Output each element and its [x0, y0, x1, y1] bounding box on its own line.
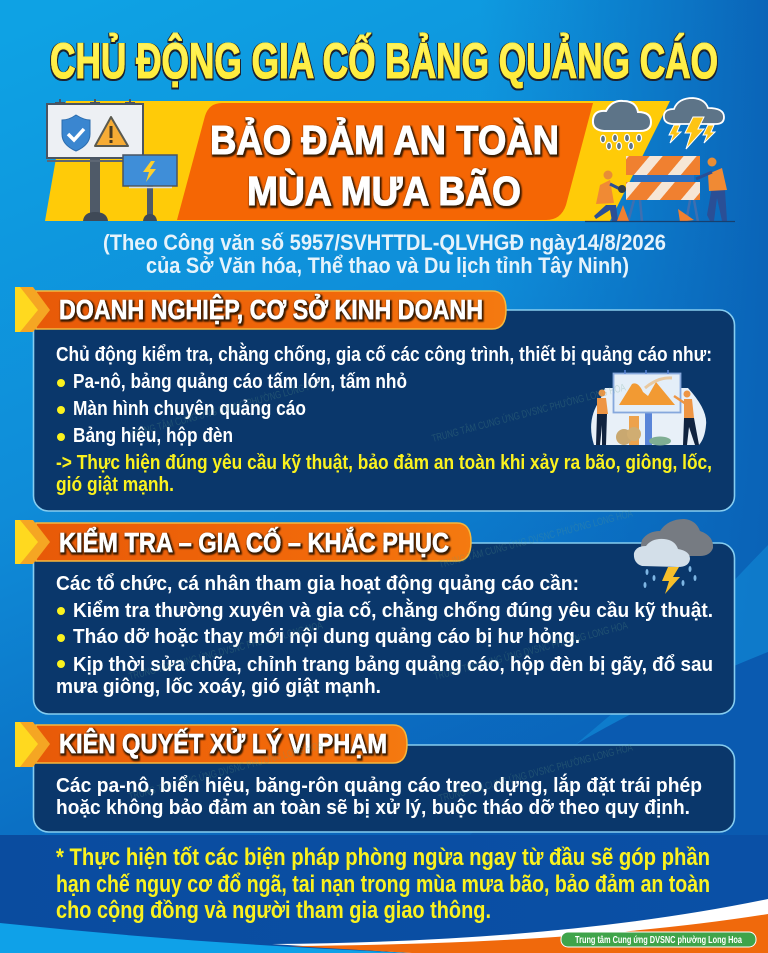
header: businesses [15, 287, 506, 332]
banner orange panel [177, 103, 593, 220]
icon: traffic cones [617, 205, 629, 221]
header: enforcement: KIÊN QUYẾT XỬ LÝ VI PHẠM [59, 727, 387, 759]
bullet list [56, 598, 713, 698]
closing note: cho cộng đồng và người tham gia giao thông. [56, 897, 491, 924]
banner heading: MÙA MƯA BÃO [247, 168, 521, 214]
yellow note: gió giật mạnh. [56, 473, 174, 496]
watermarks: TRUNG TÂM CUNG ỨNG DVSNC PHƯỜNG LONG HOA [127, 377, 324, 441]
icon: thunder cloud [664, 98, 724, 124]
intro text: Các tổ chức, cá nhân tham gia hoạt động quảng cáo cần: [56, 572, 579, 595]
header: enforcement [15, 722, 407, 767]
banner heading [210, 117, 559, 214]
bullet list: mưa giông, lốc xoáy, gió giật mạnh. [56, 675, 381, 698]
panel: inspect, reinforce, repair [15, 519, 734, 714]
icon: storm clouds and road workers [585, 98, 735, 222]
icon: shield [62, 115, 90, 151]
body text [56, 773, 702, 819]
panel: enforcement [15, 722, 734, 832]
bullet list: Kịp thời sửa chữa, chỉnh trang bảng quảng cáo, hộp đèn bị gãy, đổ sau [73, 653, 713, 676]
header: inspect: KIỂM TRA – GIA CỐ – KHẮC PHỤC [59, 526, 449, 558]
bullet list: Bảng hiệu, hộp đèn [73, 424, 233, 447]
banner yellow band [45, 101, 670, 221]
icon: standing worker [707, 181, 727, 221]
footer swoosh [0, 899, 768, 953]
header: businesses: DOANH NGHIỆP, CƠ SỞ KINH DOANH [59, 293, 483, 325]
bullet list: Pa-nô, bảng quảng cáo tấm lớn, tấm nhỏ [73, 370, 407, 393]
bullet list: Tháo dỡ hoặc thay mới nội dung quảng cáo bị hư hỏng. [73, 625, 580, 648]
banner heading: BẢO ĐẢM AN TOÀN [210, 117, 559, 163]
icon: rain cloud [593, 101, 651, 131]
watermarks [127, 377, 634, 805]
panel body [34, 745, 734, 832]
bullet list: Kiểm tra thường xuyên và gia cố, chằng chống đúng yêu cầu kỹ thuật. [73, 598, 713, 622]
source note: của Sở Văn hóa, Thể thao và Du lịch tỉnh Tây Ninh) [146, 253, 629, 278]
watermarks: TRUNG TÂM CUNG ỨNG DVSNC PHƯỜNG LONG HOA [432, 619, 629, 683]
icon: kneeling worker [594, 205, 618, 221]
watermarks: TRUNG TÂM CUNG ỨNG DVSNC PHƯỜNG LONG HOA [127, 739, 324, 803]
icon: billboards [47, 99, 177, 221]
bullet list [57, 370, 407, 447]
watermarks: TRUNG TÂM CUNG ỨNG DVSNC PHƯỜNG LONG HOA [430, 381, 627, 445]
yellow note [56, 451, 712, 496]
watermarks: TRUNG TÂM CUNG ỨNG DVSNC PHƯỜNG LONG HOA [127, 619, 324, 683]
panel: businesses [15, 287, 734, 511]
header: inspect [15, 520, 471, 564]
banner [45, 101, 670, 221]
panel body [34, 543, 734, 714]
source note: (Theo Công văn số 5957/SVHTTDL-QLVHGĐ ngày14/8/2026 [103, 230, 666, 255]
icon: storm cloud [634, 519, 713, 594]
body text: hoặc không bảo đảm an toàn sẽ bị xử lý, buộc tháo dỡ theo quy định. [56, 796, 690, 819]
icon: warning triangle [95, 117, 128, 146]
source note [103, 230, 666, 278]
closing note [56, 844, 710, 924]
panel body [34, 310, 734, 511]
watermarks: TRUNG TÂM CUNG ỨNG DVSNC PHƯỜNG LONG HOA [437, 741, 634, 805]
bullet list: Màn hình chuyên quảng cáo [73, 397, 306, 420]
icon: workers installing billboard [591, 370, 706, 446]
watermarks: TRUNG TÂM CUNG ỨNG DVSNC PHƯỜNG LONG HOA [437, 507, 634, 571]
body text: Các pa-nô, biển hiệu, băng-rôn quảng cáo treo, dựng, lắp đặt trái phép [56, 773, 702, 797]
icon: striped barrier [628, 200, 698, 222]
icon: lightning on small board [143, 161, 156, 182]
